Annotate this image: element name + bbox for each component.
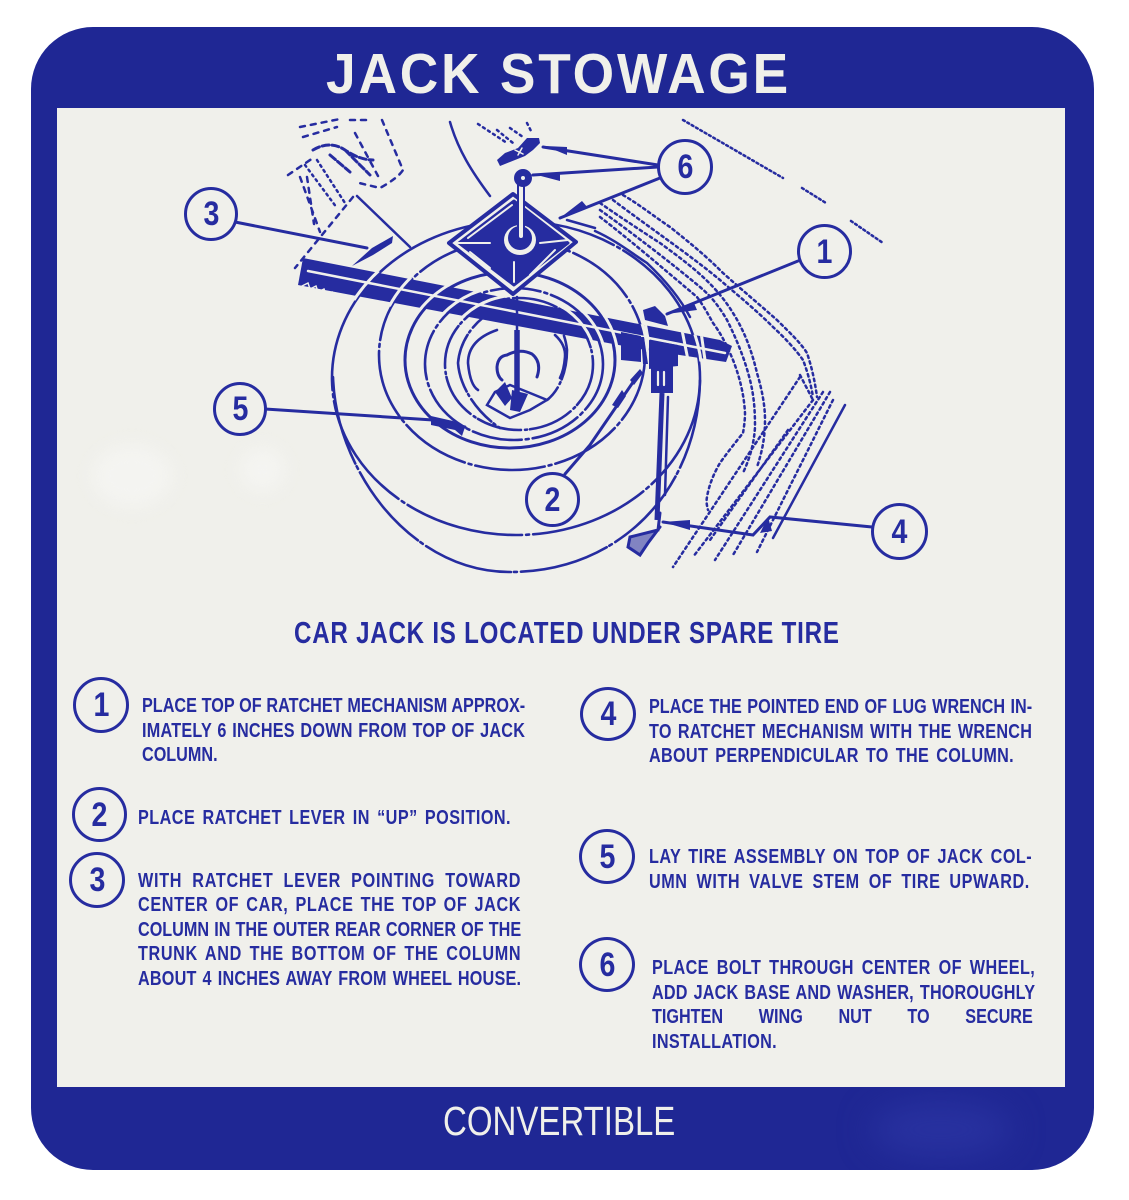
step 6 text: TIGHTEN WING NUT TO SECURE — [652, 1005, 1033, 1028]
step 1 text: IMATELY 6 INCHES DOWN FROM TOP OF JACK — [142, 718, 525, 742]
step 3 number: 3 — [89, 861, 105, 899]
faded patch right — [240, 447, 285, 492]
callout 4: 4 — [892, 512, 907, 550]
leader 5 — [265, 409, 465, 427]
wheel rings — [379, 240, 645, 470]
step 5 number — [579, 829, 635, 884]
step 6 text: INSTALLATION. — [652, 1030, 777, 1052]
subheading: CAR JACK IS LOCATED UNDER SPARE TIRE — [294, 615, 840, 650]
step 1 text — [142, 694, 525, 766]
tire tread circle — [332, 221, 700, 535]
step 4 text — [649, 695, 1032, 767]
callout 1 — [797, 224, 852, 279]
step 2 text: PLACE RATCHET LEVER IN “UP” POSITION. — [138, 806, 511, 829]
washer nut — [514, 169, 532, 187]
callout 2 — [525, 472, 580, 527]
callout 3 — [184, 187, 238, 241]
step 1 number: 1 — [93, 686, 109, 724]
faded patch left — [92, 445, 172, 507]
trunk outline dashes top left — [288, 119, 532, 268]
lug wrench handle — [657, 393, 662, 520]
step 6 number — [579, 937, 635, 992]
step 4 text: ABOUT PERPENDICULAR TO THE COLUMN. — [649, 744, 1014, 767]
step 4 text: TO RATCHET MECHANISM WITH THE WRENCH — [649, 720, 1032, 742]
diagram — [236, 118, 883, 574]
step 3 text — [138, 869, 521, 990]
step 1 text: COLUMN. — [142, 743, 218, 766]
callout 5 — [213, 382, 267, 436]
step 4 number — [580, 687, 636, 741]
step 5 text — [649, 845, 1032, 892]
step 5 text: LAY TIRE ASSEMBLY ON TOP OF JACK COL- — [649, 845, 1032, 868]
callout 2: 2 — [545, 480, 560, 518]
step 6 text — [652, 956, 1035, 1052]
step 6 text: PLACE BOLT THROUGH CENTER OF WHEEL, — [652, 956, 1035, 979]
step 4 number: 4 — [600, 695, 616, 733]
hub swirl — [497, 351, 539, 380]
top right body dashes — [683, 120, 883, 243]
callout 6: 6 — [677, 148, 693, 186]
leader 1 — [667, 261, 798, 314]
step 6 number: 6 — [599, 946, 615, 984]
white panel — [57, 108, 1065, 1087]
step 4 text: PLACE THE POINTED END OF LUG WRENCH IN- — [649, 695, 1032, 718]
leader lines and arrowheads — [235, 146, 872, 535]
wrench hook — [628, 513, 660, 555]
step 3 text: ABOUT 4 INCHES AWAY FROM WHEEL HOUSE. — [138, 967, 521, 990]
leader 3 — [235, 222, 367, 248]
ratchet mechanism — [621, 306, 678, 555]
callout 4 — [871, 503, 928, 560]
callout 6 — [657, 139, 713, 195]
tire sidewall — [333, 377, 700, 572]
hub base — [487, 385, 547, 418]
step 2 number — [72, 787, 127, 842]
wing nut — [497, 138, 540, 166]
callout 1: 1 — [817, 232, 832, 270]
title: JACK STOWAGE — [326, 42, 791, 106]
step 2 number: 2 — [92, 796, 107, 834]
wheelhouse dotted arcs — [600, 195, 833, 567]
hub washer — [504, 225, 536, 255]
footer label: CONVERTIBLE — [443, 1098, 675, 1144]
leader 6 — [533, 147, 660, 218]
spare tire — [332, 221, 700, 572]
step 3 text: WITH RATCHET LEVER POINTING TOWARD — [138, 869, 521, 892]
wheelhouse solid lines — [567, 220, 845, 538]
step 3 text: COLUMN IN THE OUTER REAR CORNER OF THE — [138, 918, 521, 941]
trunk solid lines — [357, 122, 490, 247]
step 3 text: TRUNK AND THE BOTTOM OF THE COLUMN — [138, 942, 521, 965]
step 6 text: ADD JACK BASE AND WASHER, THOROUGHLY — [652, 980, 1035, 1004]
jack base plate — [449, 138, 576, 345]
bolt — [518, 180, 524, 236]
leader 2 — [565, 372, 640, 474]
step 3 text: CENTER OF CAR, PLACE THE TOP OF JACK — [138, 893, 521, 916]
step 3 number — [69, 852, 125, 908]
callout 5: 5 — [232, 390, 248, 428]
step 1 text: PLACE TOP OF RATCHET MECHANISM APPROX- — [142, 694, 525, 717]
ratchet rack — [298, 258, 732, 362]
socket — [651, 366, 673, 393]
callout 3: 3 — [203, 195, 219, 233]
leader 4 — [663, 517, 872, 535]
step 5 number: 5 — [599, 838, 615, 876]
center post — [514, 330, 520, 405]
step 5 text: UMN WITH VALVE STEM OF TIRE UPWARD. — [649, 870, 1030, 892]
step 1 number — [73, 677, 129, 733]
rack breaks where rings cross — [354, 272, 706, 362]
